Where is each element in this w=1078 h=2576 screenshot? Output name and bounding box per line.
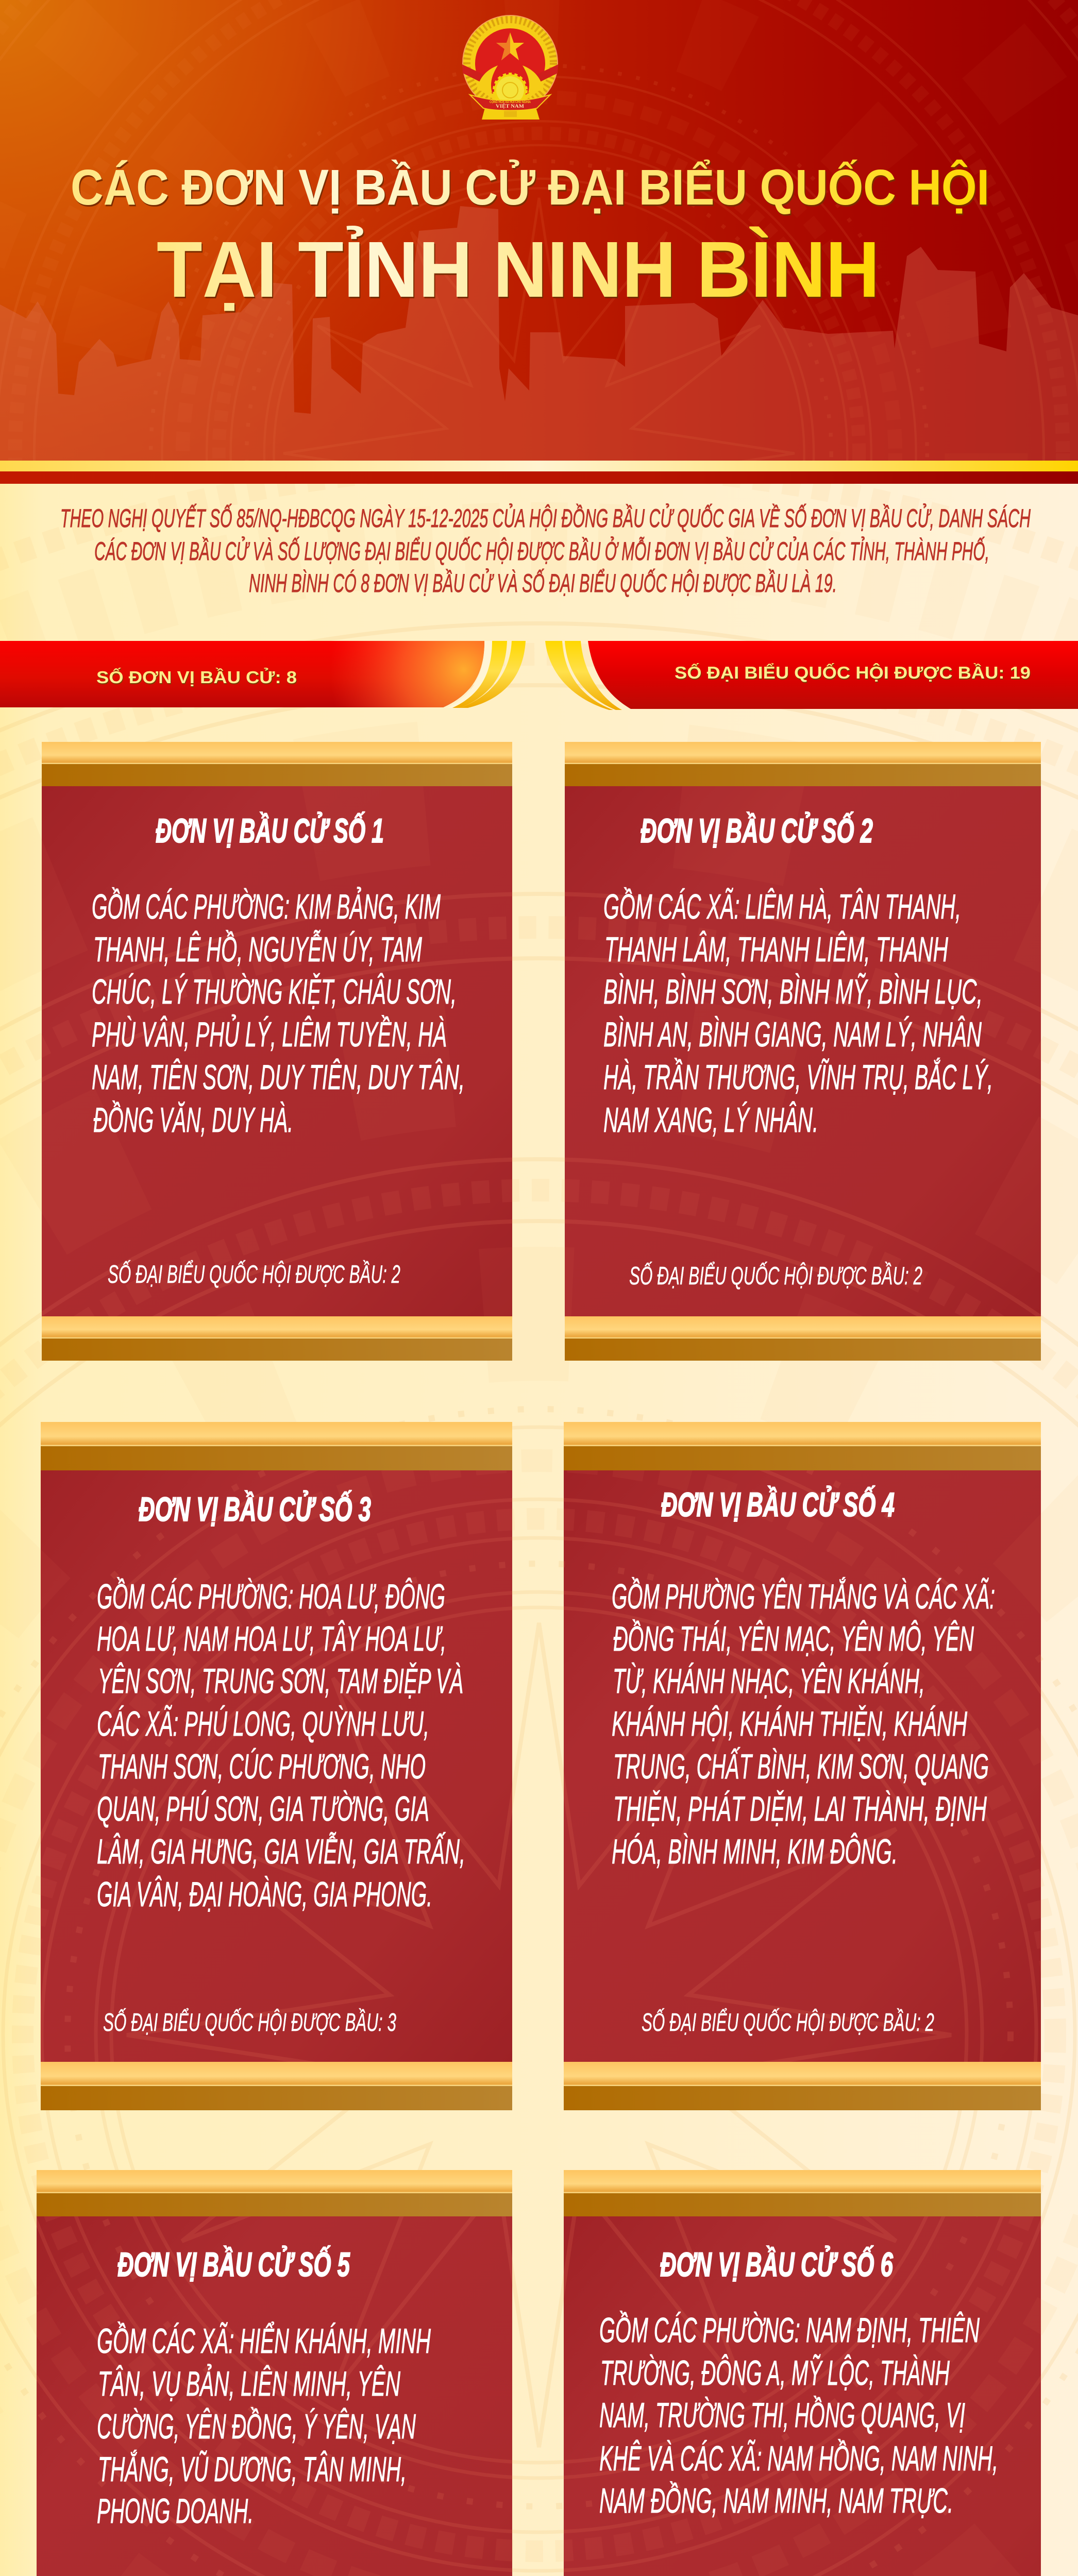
text block: wards: PHÙ VÂN, PHỦ LÝ, LIÊM TUYỀN, HÀ [92,1014,447,1054]
title [71,159,989,314]
heading: ĐƠN VỊ BẦU CỬ SỐ 5 [117,2245,350,2283]
text block: wards and communes: QUAN, PHÚ SƠN, GIA TƯỜNG, GIA [97,1789,429,1828]
left ribbon: number of units: SỐ ĐƠN VỊ BẦU CỬ: 8 [96,667,297,687]
gold band [0,461,1078,471]
text block: communes: GỒM CÁC XÃ: HIỂN KHÁNH, MINH [97,2321,431,2361]
deputies count: SỐ ĐẠI BIỂU QUỐC HỘI ĐƯỢC BẦU: 2 [629,1262,922,1290]
text block: wards and communes: LÂM, GIA HƯNG, GIA VIỄN, GIA TRẤN, [97,1832,465,1871]
right ribbon: number of deputies: SỐ ĐẠI BIỂU QUỐC HỘI ĐƯỢC BẦU: 19 [675,663,1031,682]
title: CÁC ĐƠN VỊ BẦU CỬ ĐẠI BIỂU QUỐC HỘI [71,159,989,215]
text block: wards [92,886,465,1140]
panel: electoral unit 3 [41,1422,512,2110]
heading: ĐƠN VỊ BẦU CỬ SỐ 3 [139,1490,371,1528]
red band [0,471,1078,484]
icon: national emblem of Vietnam [462,15,558,120]
text block: wards: GỒM CÁC PHƯỜNG: KIM BẢNG, KIM [92,886,441,926]
left ribbon: number of units [0,641,526,708]
text block: wards and communes: HOA LƯ, NAM HOA LƯ, TÂY HOA LƯ, [97,1619,446,1658]
text block: communes: PHONG DOANH. [97,2492,254,2531]
header banner [0,0,1078,484]
right ribbon: number of deputies [545,641,1078,710]
text block: wards and communes: THANH SƠN, CÚC PHƯƠNG, NHO [98,1747,426,1786]
text block: communes [97,2321,431,2531]
text block: communes: TÂN, VỤ BẢN, LIÊN MINH, YÊN [98,2363,401,2403]
panel: electoral unit 4 [564,1422,1041,2110]
text block: communes: NAM XANG, LÝ NHÂN. [603,1100,818,1140]
text block: wards: CHÚC, LÝ THƯỜNG KIỆT, CHÂU SƠN, [92,972,457,1011]
heading: ĐƠN VỊ BẦU CỬ SỐ 1 [156,811,384,850]
panel: electoral unit 2 [565,742,1041,1361]
city skyline [0,206,1078,461]
panel: electoral unit 6 [564,2170,1041,2576]
heading: ĐƠN VỊ BẦU CỬ SỐ 6 [660,2245,894,2283]
text block: wards: ĐỒNG VĂN, DUY HÀ. [93,1100,293,1140]
panel: electoral unit 5 [37,2170,512,2576]
text block: ward and communes [612,1577,995,1871]
intro text block [60,503,1031,598]
text block: wards and communes: GIA VÂN, ĐẠI HOÀNG, GIA PHONG. [97,1875,432,1914]
deputies count: SỐ ĐẠI BIỂU QUỐC HỘI ĐƯỢC BẦU: 3 [103,2008,396,2037]
emblem motto: VIỆT NAM [496,104,525,109]
text block: wards and communes [97,1577,465,1914]
heading: ĐƠN VỊ BẦU CỬ SỐ 4 [661,1485,895,1523]
text block: wards and communes: YÊN SƠN, TRUNG SƠN, TAM ĐIỆP VÀ [98,1662,463,1701]
panel: electoral unit 1 [42,742,512,1361]
text block: wards: THANH, LÊ HỒ, NGUYỄN ÚY, TAM [93,929,422,969]
text block: wards: NAM, TIÊN SƠN, DUY TIÊN, DUY TÂN, [92,1058,465,1097]
emblem motto: CỘNG HÒA XÃ HỘI CHỦ NGHĨA [490,99,531,104]
text block: communes: THẮNG, VŨ DƯƠNG, TÂN MINH, [98,2449,407,2489]
text block: wards and communes [599,2310,998,2520]
title: TẠI TỈNH NINH BÌNH [157,225,880,314]
text block: wards and communes: CÁC XÃ: PHÚ LONG, QUỲNH LƯU, [97,1704,429,1743]
text block: wards and communes: GỒM CÁC PHƯỜNG: HOA LƯ, ĐÔNG [97,1577,445,1616]
text block: communes: CƯỜNG, YÊN ĐỒNG, Ý YÊN, VẠN [97,2406,416,2446]
emblem motto [490,99,531,109]
heading: ĐƠN VỊ BẦU CỬ SỐ 2 [641,811,873,850]
text block: communes [603,887,993,1140]
deputies count: SỐ ĐẠI BIỂU QUỐC HỘI ĐƯỢC BẦU: 2 [108,1260,400,1289]
